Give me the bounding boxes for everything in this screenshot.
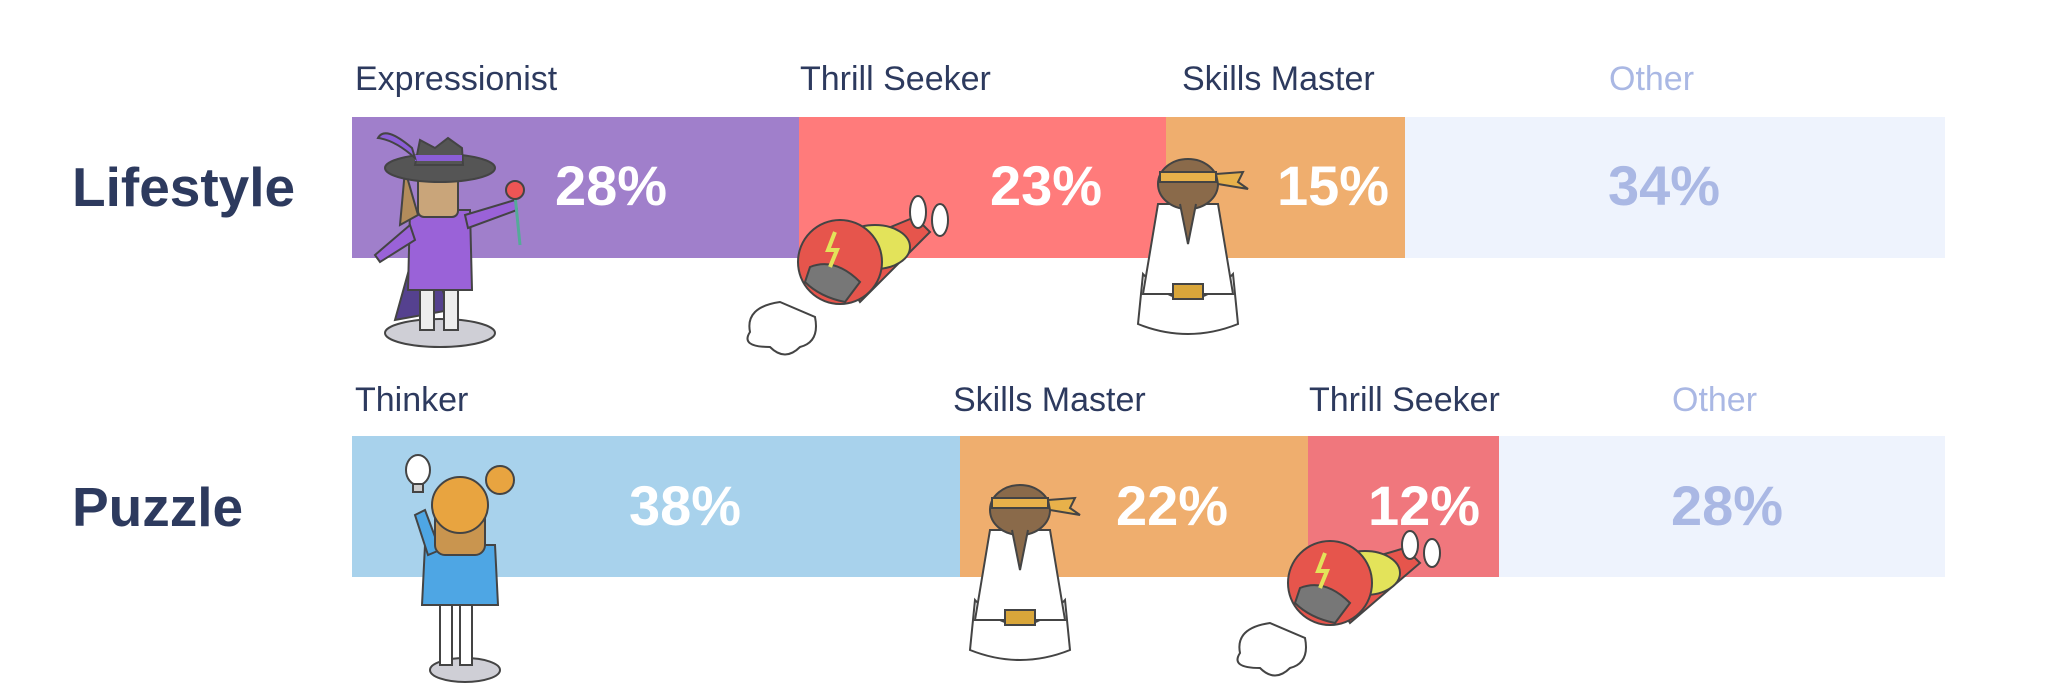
percent: 38% thinker: 38% [629, 474, 741, 537]
icon: skydiver (lifestyle) [748, 196, 948, 354]
segment: Skills Master 22% [960, 436, 1308, 577]
label: Thrill Seeker (puzzle): Thrill Seeker [1309, 381, 1500, 419]
icon: thinker character [406, 455, 514, 682]
segment: Thrill Seeker 23% [799, 117, 1166, 258]
label: Skills Master (lifestyle): Skills Master [1182, 60, 1375, 98]
label: Expressionist: Expressionist [355, 60, 557, 98]
label: Other (puzzle): Other [1672, 381, 1757, 419]
bar: Puzzle [352, 436, 1945, 577]
bar: Lifestyle [352, 117, 1945, 258]
label: Skills Master (puzzle): Skills Master [953, 381, 1146, 419]
percent: 28% expressionist: 28% [555, 154, 667, 217]
segment: Other 34% [1405, 117, 1945, 258]
segment: Thinker 38% [352, 436, 960, 577]
segment: Skills Master 15% [1166, 117, 1405, 258]
label: Thrill Seeker (lifestyle): Thrill Seeker [800, 60, 991, 98]
segment: Expressionist 28% [352, 117, 799, 258]
segment: Other 28% [1499, 436, 1945, 577]
icon: expressionist character [375, 133, 524, 347]
icon: skills master (puzzle) [970, 485, 1080, 660]
row heading: Puzzle: Puzzle [72, 476, 243, 538]
percent: 23% thrill seeker: 23% [990, 154, 1102, 217]
percent: 22% skills master: 22% [1116, 474, 1228, 537]
segment: Thrill Seeker 12% [1308, 436, 1499, 577]
row heading: Lifestyle: Lifestyle [72, 156, 295, 218]
percent: 15% skills master: 15% [1277, 154, 1389, 217]
label: Thinker: Thinker [355, 381, 468, 419]
percent: 34% other: 34% [1608, 154, 1720, 217]
icon: skydiver (puzzle) [1238, 531, 1440, 676]
label: Other (lifestyle): Other [1609, 60, 1694, 98]
icon: skills master (lifestyle) [1138, 159, 1248, 334]
percent: 28% other: 28% [1671, 474, 1783, 537]
percent: 12% thrill seeker: 12% [1368, 474, 1480, 537]
